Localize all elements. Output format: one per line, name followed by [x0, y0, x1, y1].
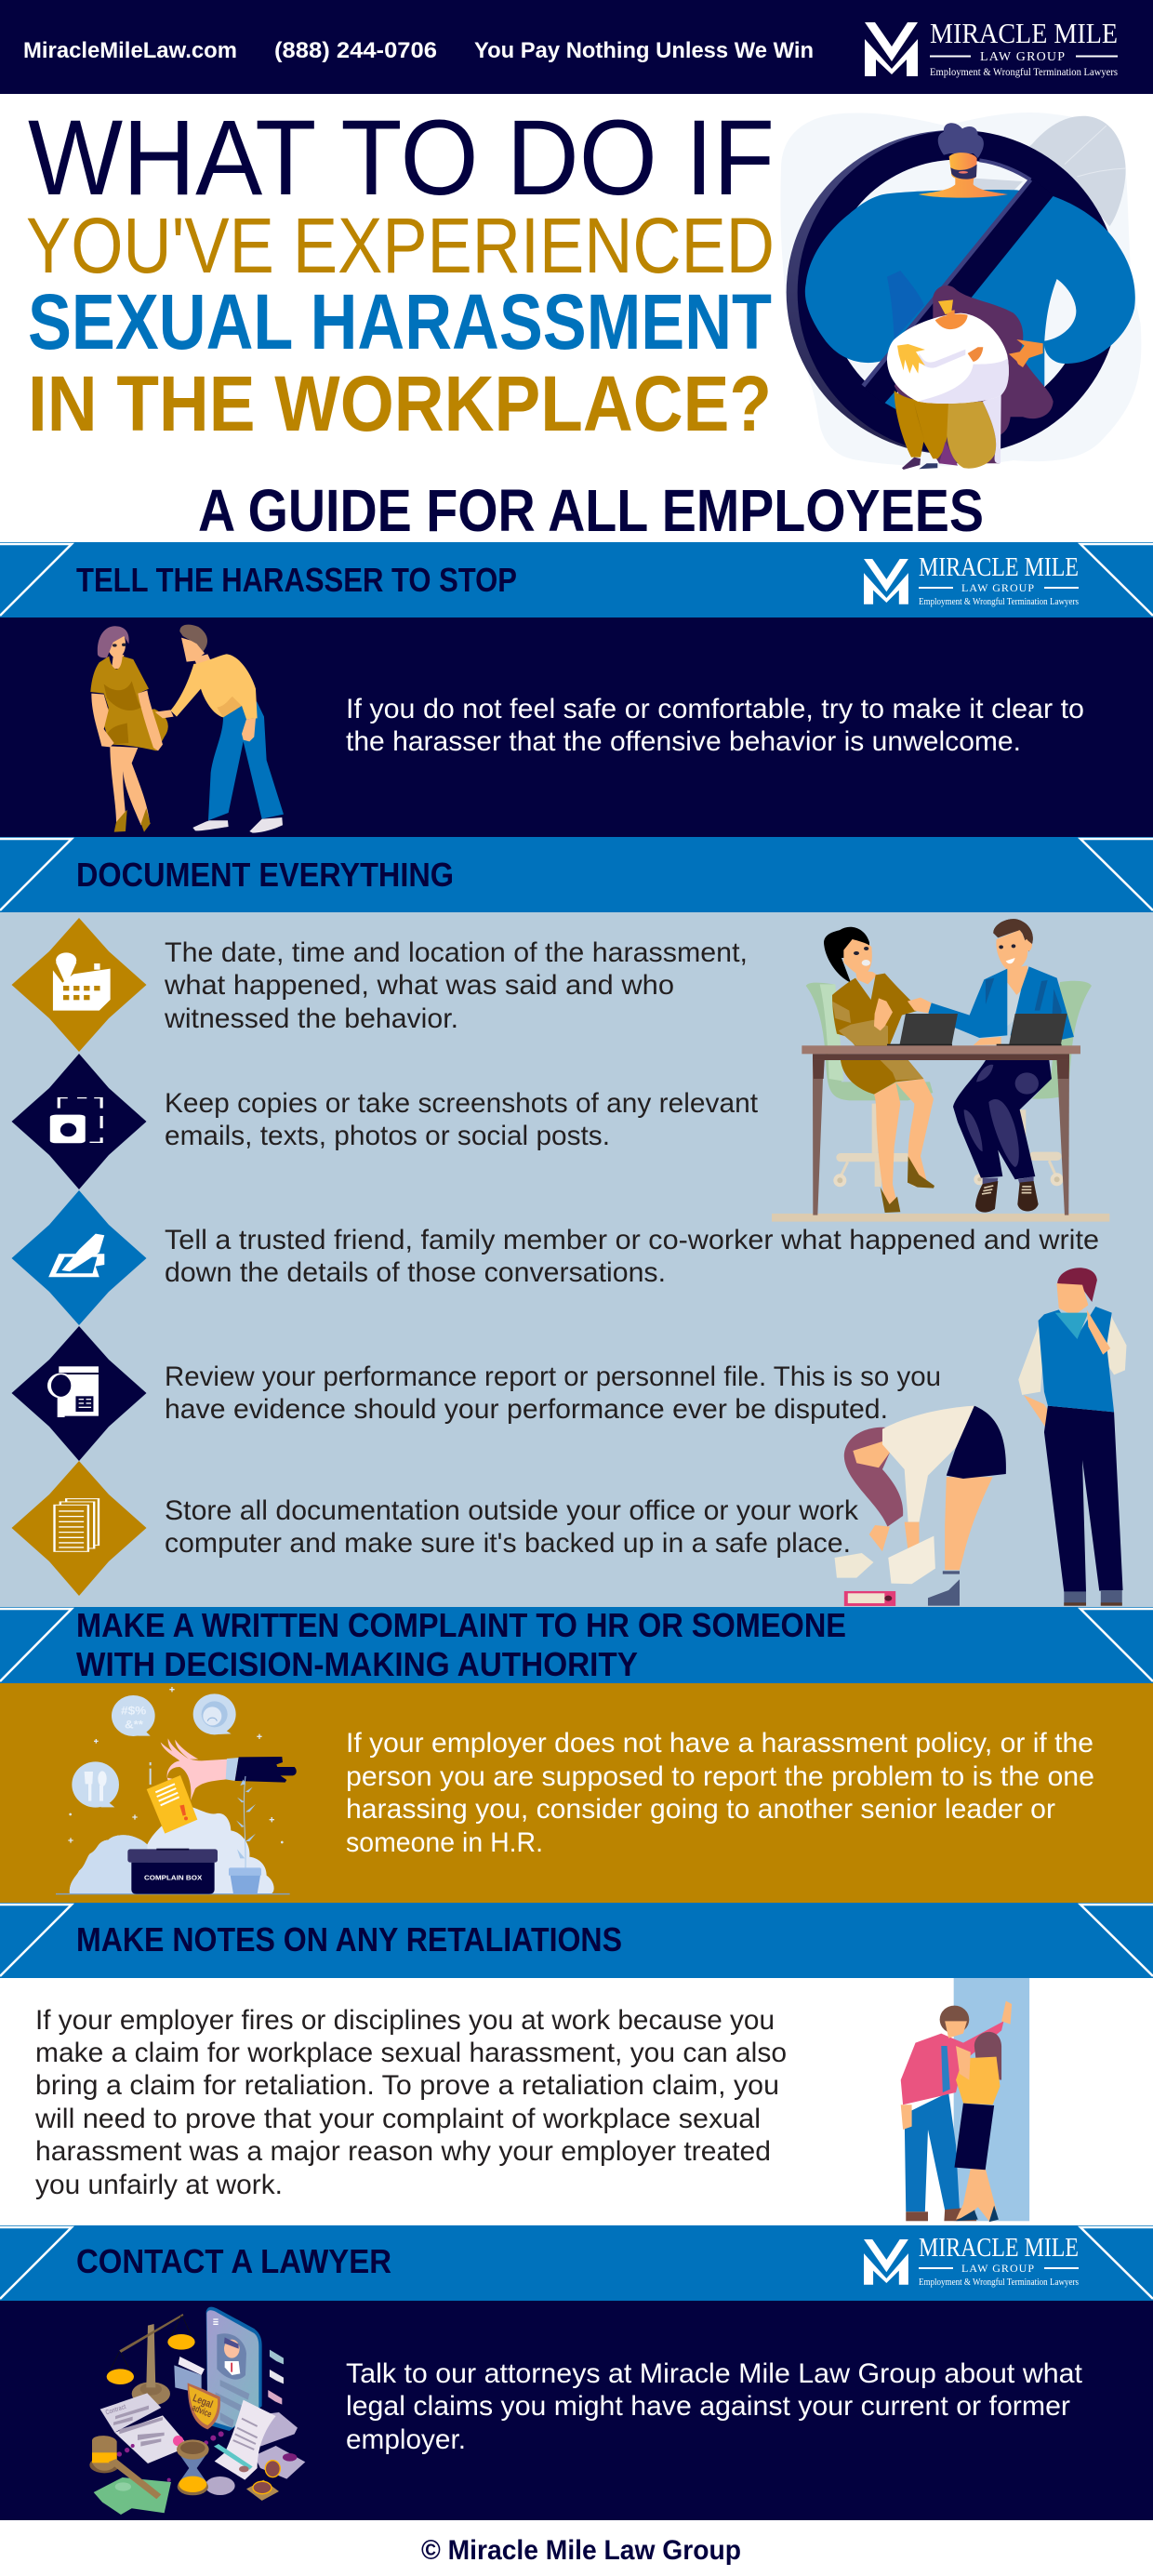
- logo: band: MIRACLE MILE: [919, 553, 1079, 582]
- logo: band: LAW GROUP: [961, 2262, 1034, 2275]
- box label: COMPLAIN BOX: [144, 1874, 203, 1882]
- section band: WITH DECISION-MAKING AUTHORITY: [76, 1645, 638, 1683]
- item 3: diamond icon writing: [11, 1190, 147, 1325]
- website: MiracleMileLaw.com: [23, 38, 237, 63]
- title: [26, 99, 775, 447]
- item 2 text: Keep copies or take screenshots of any relevant: [165, 1088, 759, 1119]
- item 2 text: [165, 1088, 759, 1151]
- item 1 text: The date, time and location of the harassment,: [165, 937, 748, 968]
- logo: band: [864, 553, 1079, 607]
- item 1 text: [164, 937, 748, 1034]
- illustration: woman bending and man watching: [835, 1268, 1127, 1606]
- logo: band: MIRACLE MILE: [919, 2234, 1079, 2263]
- body text: person you are supposed to report the problem to is the one: [346, 1761, 1094, 1792]
- bubble text: [121, 1704, 147, 1731]
- illustration: man cornering woman against wall: [901, 1978, 1029, 2222]
- section band: [0, 1903, 1153, 1978]
- body text: you unfairly at work.: [35, 2170, 283, 2200]
- logo: header: MIRACLE MILE: [930, 17, 1118, 49]
- bubble text: &**: [125, 1718, 143, 1731]
- item 3 text: Tell a trusted friend, family member or co-worker what happened and write: [165, 1225, 1099, 1255]
- top contact bar: [0, 0, 1153, 94]
- item 5 text: [165, 1495, 859, 1559]
- section band: DOCUMENT EVERYTHING: [76, 856, 454, 894]
- logo: header: LAW GROUP: [980, 50, 1065, 64]
- title: IN THE WORKPLACE?: [28, 360, 772, 447]
- section band: TELL THE HARASSER TO STOP: [76, 561, 517, 599]
- item 2: diamond icon camera screenshot: [11, 1054, 147, 1189]
- logo: header: Employment & Wrongful Termination Lawyers: [930, 65, 1118, 78]
- body text: will need to prove that your complaint of workplace sexual: [34, 2104, 761, 2134]
- section band: CONTACT A LAWYER: [76, 2242, 391, 2280]
- item 4 text: [165, 1361, 941, 1425]
- item 5 text: computer and make sure it's backed up in a safe place.: [165, 1528, 851, 1559]
- body text: harassment was a major reason why your employer treated: [35, 2136, 771, 2167]
- section band: [0, 1606, 1153, 1683]
- footer copyright: © Miracle Mile Law Group: [421, 2535, 741, 2566]
- body text: someone in H.R.: [346, 1827, 543, 1858]
- logo: band: [864, 2234, 1079, 2288]
- body text: harassing you, consider going to another senior leader or: [346, 1794, 1055, 1825]
- logo: band: Employment & Wrongful Termination Lawyers: [919, 2277, 1079, 2288]
- body text: If you do not feel safe or comfortable, try to make it clear to: [346, 694, 1084, 724]
- panel: written complaint: [0, 1606, 1153, 1903]
- body text: [34, 2005, 787, 2200]
- phone number: (888) 244-0706: [274, 38, 437, 63]
- section band: [0, 2225, 1153, 2301]
- illustration: man touching woman's dress: [90, 625, 284, 833]
- body text: [346, 1728, 1094, 1858]
- logo: band: Employment & Wrongful Termination Lawyers: [919, 597, 1079, 607]
- hero illustration: prohibition sign with man and woman: [780, 113, 1141, 470]
- contract label: Contract: [104, 2402, 127, 2417]
- title: SEXUAL HARASSMENT: [28, 278, 772, 365]
- body text: the harasser that the offensive behavior is unwelcome.: [346, 726, 1021, 757]
- section band: MAKE A WRITTEN COMPLAINT TO HR OR SOMEONE: [76, 1606, 846, 1644]
- shield text: [191, 2393, 214, 2420]
- item 4: diamond icon file and magnifier: [11, 1326, 147, 1461]
- item 1: diamond icon location calendar: [11, 918, 147, 1052]
- section band: MAKE NOTES ON ANY RETALIATIONS: [76, 1920, 622, 1959]
- body text: If your employer does not have a harassment policy, or if the: [346, 1728, 1093, 1759]
- item 5: diamond icon document stack: [11, 1461, 147, 1596]
- body text: make a claim for workplace sexual harassment, you can also: [35, 2038, 787, 2068]
- panel: retaliations: [0, 1903, 1153, 2222]
- item 1 text: what happened, what was said and who: [164, 970, 674, 1001]
- body text: If your employer fires or disciplines you at work because you: [35, 2005, 775, 2036]
- item 3 text: down the details of those conversations.: [165, 1257, 666, 1288]
- body text: legal claims you might have against your current or former: [346, 2391, 1070, 2422]
- section band: [0, 837, 1153, 912]
- illustration: coworkers at desk: [772, 919, 1109, 1222]
- panel: tell the harasser to stop: [0, 542, 1153, 837]
- slogan: You Pay Nothing Unless We Win: [474, 38, 814, 63]
- subtitle: A GUIDE FOR ALL EMPLOYEES: [198, 477, 984, 544]
- logo: header: [865, 17, 1118, 78]
- item 2 text: emails, texts, photos or social posts.: [165, 1121, 610, 1151]
- logo: band: LAW GROUP: [961, 581, 1034, 594]
- body text: [346, 2358, 1083, 2455]
- item 3 text: [165, 1225, 1099, 1288]
- panel: contact a lawyer: [0, 2225, 1153, 2520]
- item 4 text: have evidence should your performance ever be disputed.: [165, 1394, 888, 1425]
- shield text: advice: [191, 2403, 213, 2420]
- section band: [0, 542, 1153, 617]
- body text: bring a claim for retaliation. To prove a retaliation claim, you: [35, 2070, 779, 2101]
- bubble text: #$%: [121, 1704, 147, 1717]
- title: YOU'VE EXPERIENCED: [26, 202, 775, 289]
- item 1 text: witnessed the behavior.: [164, 1003, 458, 1034]
- illustration: legal items and phone: [89, 2307, 305, 2515]
- title: WHAT TO DO IF: [28, 99, 775, 218]
- item 5 text: Store all documentation outside your office or your work: [165, 1495, 859, 1526]
- body text: [346, 694, 1084, 757]
- body text: Talk to our attorneys at Miracle Mile Law Group about what: [346, 2358, 1083, 2389]
- panel: document everything: [0, 837, 1153, 1607]
- body text: employer.: [346, 2424, 466, 2455]
- shield text: Legal: [192, 2393, 214, 2410]
- illustration: complaint box: [56, 1687, 297, 1894]
- item 4 text: Review your performance report or personnel file. This is so you: [165, 1361, 941, 1392]
